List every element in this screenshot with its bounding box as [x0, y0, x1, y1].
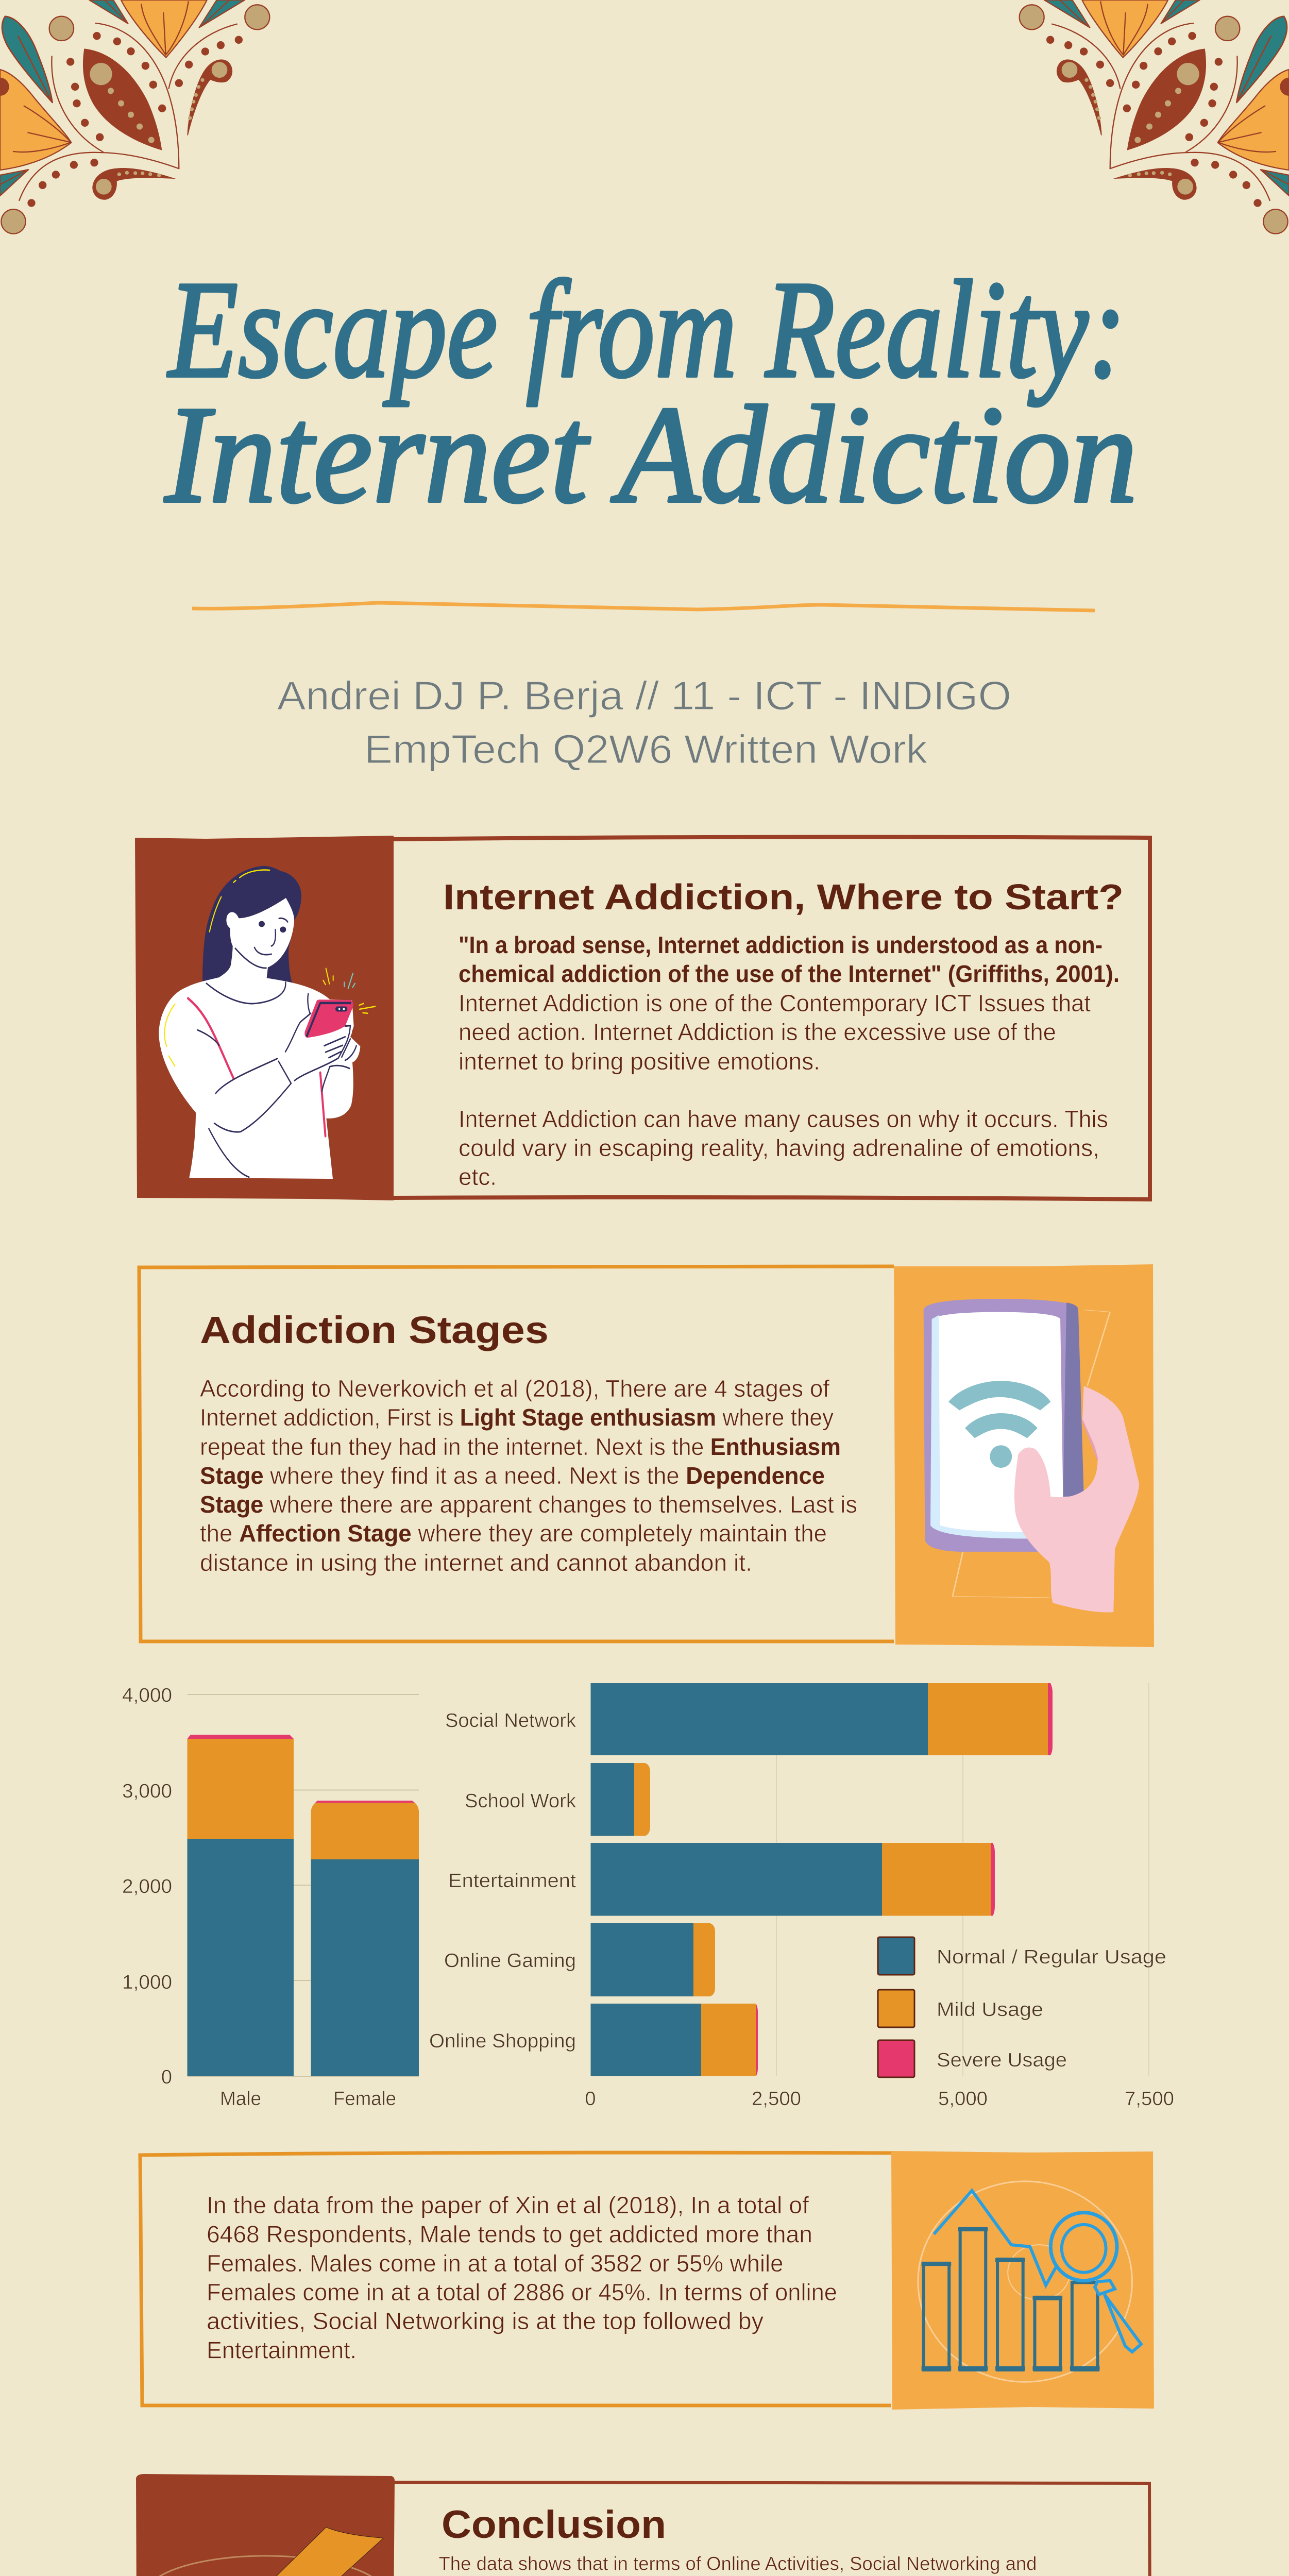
title underline	[192, 603, 1095, 611]
body text: 6468 Respondents, Male tends to get addicted more than	[207, 2221, 812, 2247]
chart: stacked bars by online activity	[429, 1683, 1174, 2110]
illustration: woman with phone	[159, 866, 375, 1179]
category labels: Online Shopping	[429, 2030, 576, 2052]
value axis labels: 0	[585, 2088, 596, 2110]
body text: activities, Social Networking is at the top followed by	[207, 2308, 764, 2334]
panel: conclusion	[136, 2474, 1150, 2576]
bar: social network	[590, 1683, 1053, 1755]
panel outline	[140, 2153, 891, 2405]
category labels: Online Gaming	[444, 1950, 576, 1972]
panel: where to start	[135, 836, 1150, 1200]
y axis labels: 3,000	[122, 1781, 172, 1802]
panel: data summary	[140, 2151, 1154, 2410]
subtitle: EmpTech Q2W6 Written Work	[364, 726, 928, 772]
body text: According to Neverkovich et al (2018), There are 4 stages of	[200, 1375, 829, 1402]
panel: addiction stages	[139, 1264, 1154, 1647]
body text: the Affection Stage where they are completely maintain the	[200, 1520, 827, 1547]
subtitle	[277, 673, 1011, 772]
body text: Stage where they find it as a need. Next is the Dependence	[200, 1462, 825, 1489]
legend: Severe Usage	[937, 2049, 1067, 2071]
body text: repeat the fun they had in the internet. Next is the Enthusiasm	[200, 1433, 841, 1460]
body text	[200, 1375, 857, 1576]
panel colour block	[135, 836, 394, 1200]
y axis labels	[122, 1685, 172, 2088]
body text: distance in using the internet and cannot abandon it.	[200, 1549, 752, 1576]
heading: Addiction Stages	[200, 1309, 549, 1351]
x axis labels: Female	[333, 2088, 396, 2110]
bar: online gaming	[590, 1923, 715, 1996]
body text: etc.	[459, 1163, 497, 1190]
value axis labels: 5,000	[938, 2088, 988, 2110]
icon: check mark	[146, 2527, 385, 2576]
bar: female	[311, 1801, 419, 2076]
body text: Females come in at a total of 2886 or 45%. In terms of online	[207, 2279, 837, 2306]
panel colour block	[891, 2151, 1154, 2410]
body text: need action. Internet Addiction is the excessive use of the	[459, 1019, 1056, 1045]
value axis labels: 7,500	[1125, 2088, 1174, 2110]
body text	[459, 931, 1120, 1190]
panel outline	[394, 837, 1150, 1199]
value axis labels: 2,500	[752, 2088, 801, 2110]
body text: Internet Addiction is one of the Contemporary ICT Issues that	[459, 990, 1091, 1016]
category labels: Social Network	[445, 1710, 576, 1732]
body text: chemical addiction of the use of the Internet" (Griffiths, 2001).	[459, 960, 1120, 987]
legend: Normal / Regular Usage	[937, 1946, 1166, 1968]
body text: Internet Addiction can have many causes on why it occurs. This	[459, 1106, 1108, 1132]
body text: "In a broad sense, Internet addiction is understood as a non-	[459, 931, 1103, 958]
body text: Internet addiction, First is Light Stage enthusiasm where they	[200, 1404, 834, 1431]
title: Internet Addiction	[163, 378, 1138, 532]
x axis labels	[220, 2088, 396, 2110]
category labels: Entertainment	[448, 1870, 576, 1892]
panel outline	[139, 1266, 894, 1641]
legend: Mild Usage	[937, 1999, 1043, 2021]
panel outline	[394, 2482, 1150, 2576]
y axis labels: 4,000	[122, 1685, 172, 1706]
y axis labels: 0	[161, 2066, 172, 2088]
bar: entertainment	[590, 1843, 995, 1916]
title	[163, 252, 1138, 532]
category labels: School Work	[465, 1790, 576, 1812]
panel colour block	[136, 2474, 395, 2576]
icon: bar chart with magnifier	[918, 2181, 1141, 2382]
bar: male	[188, 1735, 294, 2076]
body text	[207, 2192, 837, 2364]
bar: school work	[590, 1763, 650, 1836]
illustration: hand holding phone with wifi	[924, 1299, 1139, 1612]
heading: Conclusion	[442, 2503, 666, 2547]
body text: Stage where there are apparent changes to themselves. Last is	[200, 1491, 857, 1518]
body text: Entertainment.	[207, 2337, 357, 2364]
body text: Females. Males come in at a total of 3582 or 55% while	[207, 2250, 783, 2277]
ornament: top left corner	[0, 0, 269, 234]
panel colour block	[894, 1264, 1154, 1647]
bar: online shopping	[590, 2004, 758, 2076]
body text: In the data from the paper of Xin et al (2018), In a total of	[207, 2192, 809, 2218]
body text: could vary in escaping reality, having adrenaline of emotions,	[459, 1134, 1099, 1161]
chart: stacked column by gender	[122, 1685, 419, 2110]
category labels	[429, 1710, 576, 2052]
heading: Internet Addiction, Where to Start?	[443, 877, 1124, 917]
body text: The data shows that in terms of Online Activities, Social Networking and	[439, 2553, 1037, 2574]
subtitle: Andrei DJ P. Berja // 11 - ICT - INDIGO	[277, 673, 1011, 718]
y axis labels: 1,000	[122, 1972, 172, 1993]
value axis labels	[585, 2088, 1174, 2110]
ornament: top right corner	[1020, 0, 1289, 234]
x axis labels: Male	[220, 2088, 261, 2110]
legend	[878, 1937, 1166, 2077]
y axis labels: 2,000	[122, 1876, 172, 1897]
body text: internet to bring positive emotions.	[459, 1048, 820, 1075]
